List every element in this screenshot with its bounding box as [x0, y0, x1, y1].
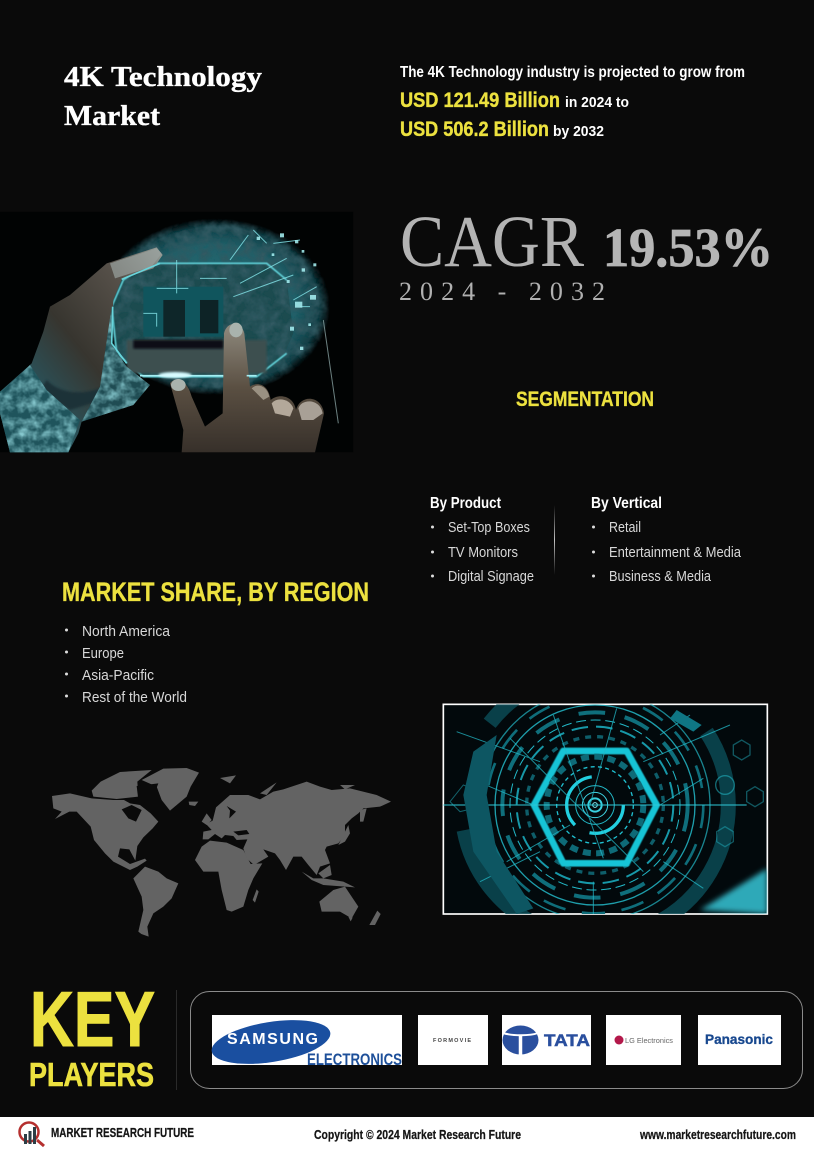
hologram cloud [100, 218, 330, 395]
title [64, 62, 262, 132]
segment list: by product: Digital Signage [448, 568, 534, 585]
segment list: by vertical: Business & Media [609, 568, 712, 585]
market size summary: by 2032 [553, 123, 604, 140]
region list: North America [82, 623, 171, 640]
logo: Panasonic [698, 1015, 781, 1065]
footer: MARKET RESEARCH FUTURE [51, 1126, 194, 1140]
left hand [0, 247, 163, 452]
CAGR figure: CAGR [400, 201, 584, 282]
logo: Panasonic: Panasonic [705, 1032, 773, 1047]
logo: Formovie [418, 1015, 488, 1065]
footer [0, 1117, 814, 1150]
logo: Samsung Electronics [209, 1013, 402, 1071]
title: 4K Technology [64, 62, 262, 93]
logo: Samsung Electronics: ELECTRONICS [307, 1050, 402, 1069]
footer: Copyright © 2024 Market Research Future [314, 1127, 521, 1142]
icon: market research future logo [20, 1122, 44, 1146]
market size summary: The 4K Technology industry is projected to grow from [400, 64, 745, 81]
segment list: by vertical: By Vertical [591, 495, 662, 512]
logo: LG Electronics [606, 1015, 681, 1065]
inland seas [122, 783, 249, 835]
heading: key players: KEY [30, 975, 155, 1063]
market size summary: in 2024 to [565, 94, 629, 111]
region list: Asia-Pacific [82, 667, 154, 684]
segment list: by product: Set-Top Boxes [448, 519, 530, 536]
market size summary: USD 121.49 Billion [400, 89, 560, 112]
heading: key players: PLAYERS [29, 1056, 154, 1093]
heading: segmentation: SEGMENTATION [516, 388, 654, 411]
segment list: by product [430, 495, 534, 585]
CAGR figure: 19.53% [603, 217, 773, 278]
logo: Tata [502, 1015, 591, 1065]
CAGR figure: 2024 - 2032 [399, 277, 605, 306]
image: hand touching holographic circuit [0, 212, 353, 452]
segment list: by vertical: Retail [609, 519, 641, 536]
market size summary: USD 506.2 Billion [400, 118, 549, 141]
region list [65, 623, 187, 706]
heading: market share by region: MARKET SHARE, BY REGION [62, 577, 369, 607]
segment list: by vertical [591, 495, 742, 585]
logo: Formovie: FORMOVIE [433, 1038, 471, 1044]
world map [52, 768, 391, 937]
logo: Tata: TATA [544, 1031, 590, 1050]
CAGR figure [399, 201, 773, 306]
segment list: by product: TV Monitors [448, 544, 518, 561]
right hand fingers [170, 324, 324, 452]
logo: Samsung Electronics: SAMSUNG [227, 1031, 318, 1048]
region list: Europe [82, 645, 124, 662]
segment list: by vertical: Entertainment & Media [609, 544, 742, 561]
market size summary [400, 64, 745, 141]
heading: key players [29, 975, 155, 1093]
panel: key player logos [190, 992, 802, 1088]
title: Market [64, 101, 161, 132]
image: cyan circular technology dial [442, 704, 768, 915]
logo: LG Electronics: LG Electronics [625, 1036, 673, 1045]
segment list: by product: By Product [430, 495, 502, 512]
region list: Rest of the World [82, 689, 187, 706]
